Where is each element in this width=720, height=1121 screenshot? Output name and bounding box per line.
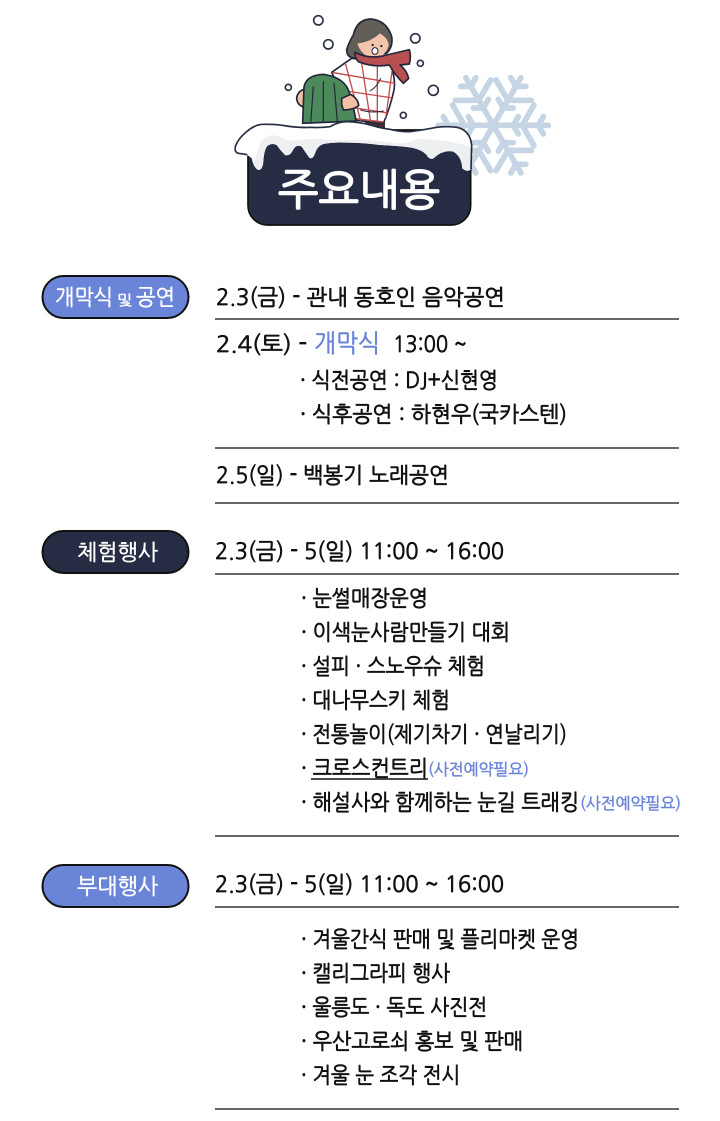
schedule: 2.4 opening ceremony bbox=[216, 331, 467, 356]
section pill: 개막식 및 공연: 개막식 bbox=[55, 286, 113, 309]
section pill: 체험행사 bbox=[42, 531, 188, 573]
side event list bbox=[301, 928, 579, 1087]
experience list: · 설피 · 스노우슈 체험 bbox=[301, 655, 485, 678]
left hand bbox=[297, 89, 305, 108]
icon: falling snow dots bbox=[285, 16, 438, 118]
experience list: (사전예약필요) bbox=[580, 795, 681, 812]
section pill: 개막식 및 공연: 공연 bbox=[136, 286, 175, 309]
experience schedule: 2.3(금) - 5(일) 11:00 ~ 16:00 bbox=[215, 540, 504, 563]
title: 주요내용 bbox=[278, 169, 440, 212]
schedule: 2.4 opening ceremony: 13:00 ~ bbox=[393, 334, 467, 356]
experience list: · 전통놀이(제기차기 · 연날리기) bbox=[301, 723, 567, 746]
schedule: 2.4 opening ceremony: 2.4(토) - bbox=[216, 334, 307, 356]
opening pre-show: · 식전공연 : DJ+신현영 bbox=[300, 369, 498, 392]
section pill: 개막식 및 공연: 및 bbox=[117, 293, 132, 308]
trousers bbox=[365, 119, 385, 130]
schedule: 2.3: 2.3(금) - 관내 동호인 음악공연 bbox=[216, 286, 505, 309]
hair bbox=[347, 19, 392, 58]
side event list: · 우산고로쇠 홍보 및 판매 bbox=[301, 1030, 523, 1053]
sled bbox=[303, 74, 356, 123]
experience list: · 눈썰매장운영 bbox=[301, 587, 428, 610]
section pill: 부대행사: 부대행사 bbox=[77, 875, 158, 898]
section pill: 개막식 및 공연 bbox=[42, 276, 188, 318]
experience list bbox=[301, 587, 681, 814]
experience list: · 이색눈사람만들기 대회 bbox=[301, 621, 510, 644]
opening post-show: · 식후공연 : 하현우(국카스텐) bbox=[300, 403, 567, 426]
header illustration bbox=[230, 16, 548, 225]
side event list: · 겨울 눈 조각 전시 bbox=[301, 1064, 460, 1087]
schedule: 2.5: 2.5(일) - 백봉기 노래공연 bbox=[216, 464, 449, 487]
section pill: 체험행사: 체험행사 bbox=[77, 541, 158, 564]
section pill: 부대행사 bbox=[42, 865, 188, 907]
experience list: · 해설사와 함께하는 눈길 트래킹 bbox=[301, 791, 579, 814]
face bbox=[357, 33, 389, 59]
title plate bbox=[248, 130, 471, 225]
icon: snowflake bbox=[438, 68, 548, 183]
experience list: (사전예약필요) bbox=[428, 761, 529, 778]
sweater bbox=[332, 58, 394, 123]
scarf bbox=[355, 50, 410, 83]
illustration: girl holding a sled bbox=[297, 19, 410, 130]
schedule: 2.4 opening ceremony: 개막식 bbox=[314, 331, 380, 356]
experience list: · 크로스컨트리 bbox=[301, 757, 428, 780]
side event list: · 겨울간식 판매 및 플리마켓 운영 bbox=[301, 928, 579, 951]
side event list: · 캘리그라피 행사 bbox=[301, 962, 450, 985]
right hand bbox=[342, 94, 359, 110]
experience list: · 대나무스키 체험 bbox=[301, 689, 450, 712]
side event schedule: 2.3(금) - 5(일) 11:00 ~ 16:00 bbox=[215, 873, 504, 896]
side event list: · 울릉도 · 독도 사진전 bbox=[301, 996, 487, 1019]
snow cap bbox=[234, 121, 472, 171]
